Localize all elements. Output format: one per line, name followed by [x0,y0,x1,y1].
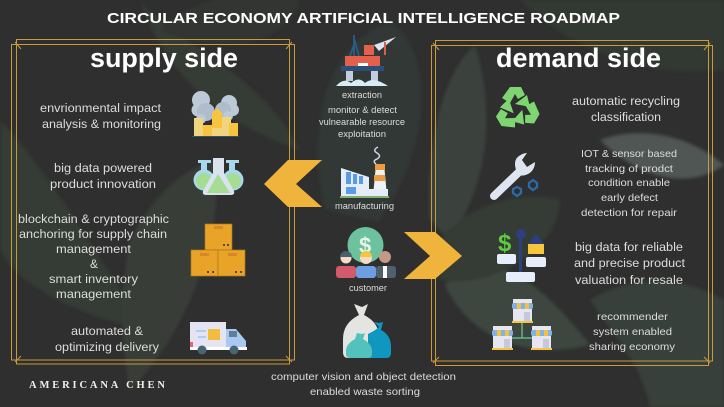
icon: flasks [194,158,244,195]
arrow: right chevron [404,232,462,279]
icon: waste bags [343,304,391,358]
text: valuation: and precise product [574,256,686,270]
text: environmental impact: analysis & monitoring [42,117,161,131]
text: manufacturing: manufacturing [335,201,394,211]
panel: supply side frame [12,40,294,364]
text: environmental impact [40,101,162,131]
text: waste sorting: computer vision and object detection [271,372,456,383]
icon: value scale [497,229,546,282]
text: delivery: optimizing delivery [55,340,160,354]
text: IOT tracking: detection for repair [581,208,678,219]
text: IOT tracking: early defect [601,193,658,204]
title: CIRCULAR ECONOMY ARTIFICIAL INTELLIGENCE ROADMAP [107,10,620,27]
icon: smog city [192,91,239,137]
text: blockchain and inventory: blockchain & cryptographic [18,212,169,226]
text: sharing economy: system enabled [593,327,672,338]
text: extraction: extraction [342,90,382,100]
icon: value scale: $ [498,230,512,257]
text: IOT tracking: tracking of prodct [585,164,673,175]
text: recycling: classification [591,110,661,124]
panel: demand side frame [432,40,712,366]
text: waste sorting: enabled waste sorting [310,387,420,398]
text: valuation: big data for reliable [575,240,683,254]
text: environmental impact: envrionmental impact [40,101,162,115]
text: blockchain and inventory: smart inventory [49,272,139,286]
text: IOT tracking: IOT & sensor based [581,149,677,160]
text: blockchain and inventory [18,212,169,301]
text: recycling: automatic recycling [572,94,680,108]
icon: factory [340,147,389,198]
text: sharing economy: sharing economy [589,342,676,353]
text: customer: customer [349,283,387,293]
arrow: left chevron [264,160,322,207]
heading: demand side: demand side [496,43,661,73]
icon: customers [336,227,396,278]
icon: customers: $ [359,233,371,258]
text: blockchain and inventory: management [56,287,132,301]
text: sharing economy: recommender [597,312,669,323]
text: product innovation: big data powered [54,161,152,175]
text: blockchain and inventory: management [56,242,132,256]
text: recycling [572,94,680,124]
icon: recycling symbol [491,87,544,133]
text: blockchain and inventory: anchoring for supply chain [19,227,167,241]
text: IOT tracking: condition enable [588,178,670,189]
icon: wrench [494,153,537,196]
heading: supply side: supply side [90,43,238,73]
text: product innovation [50,161,156,191]
text: blockchain and inventory: & [90,257,99,271]
text: monitor and detect: exploitation [338,129,386,139]
icon: boxes [191,224,245,276]
text: delivery: automated & [71,324,144,338]
text: monitor and detect: vulnearable resource [319,117,405,127]
icon: connected stores [492,299,552,350]
text: product innovation: product innovation [50,177,156,191]
icon: delivery truck [190,322,247,354]
text: IOT tracking [581,149,678,219]
text: monitor and detect [319,105,405,139]
icon: oil rig [336,35,396,86]
text: valuation [574,240,686,287]
text: delivery [55,324,160,354]
text: monitor and detect: monitor & detect [328,105,398,115]
text: waste sorting [271,372,456,398]
text: sharing economy [589,312,676,353]
text: valuation: valuation for resale [575,273,683,287]
signature: AMERICANA CHEN [29,380,165,391]
